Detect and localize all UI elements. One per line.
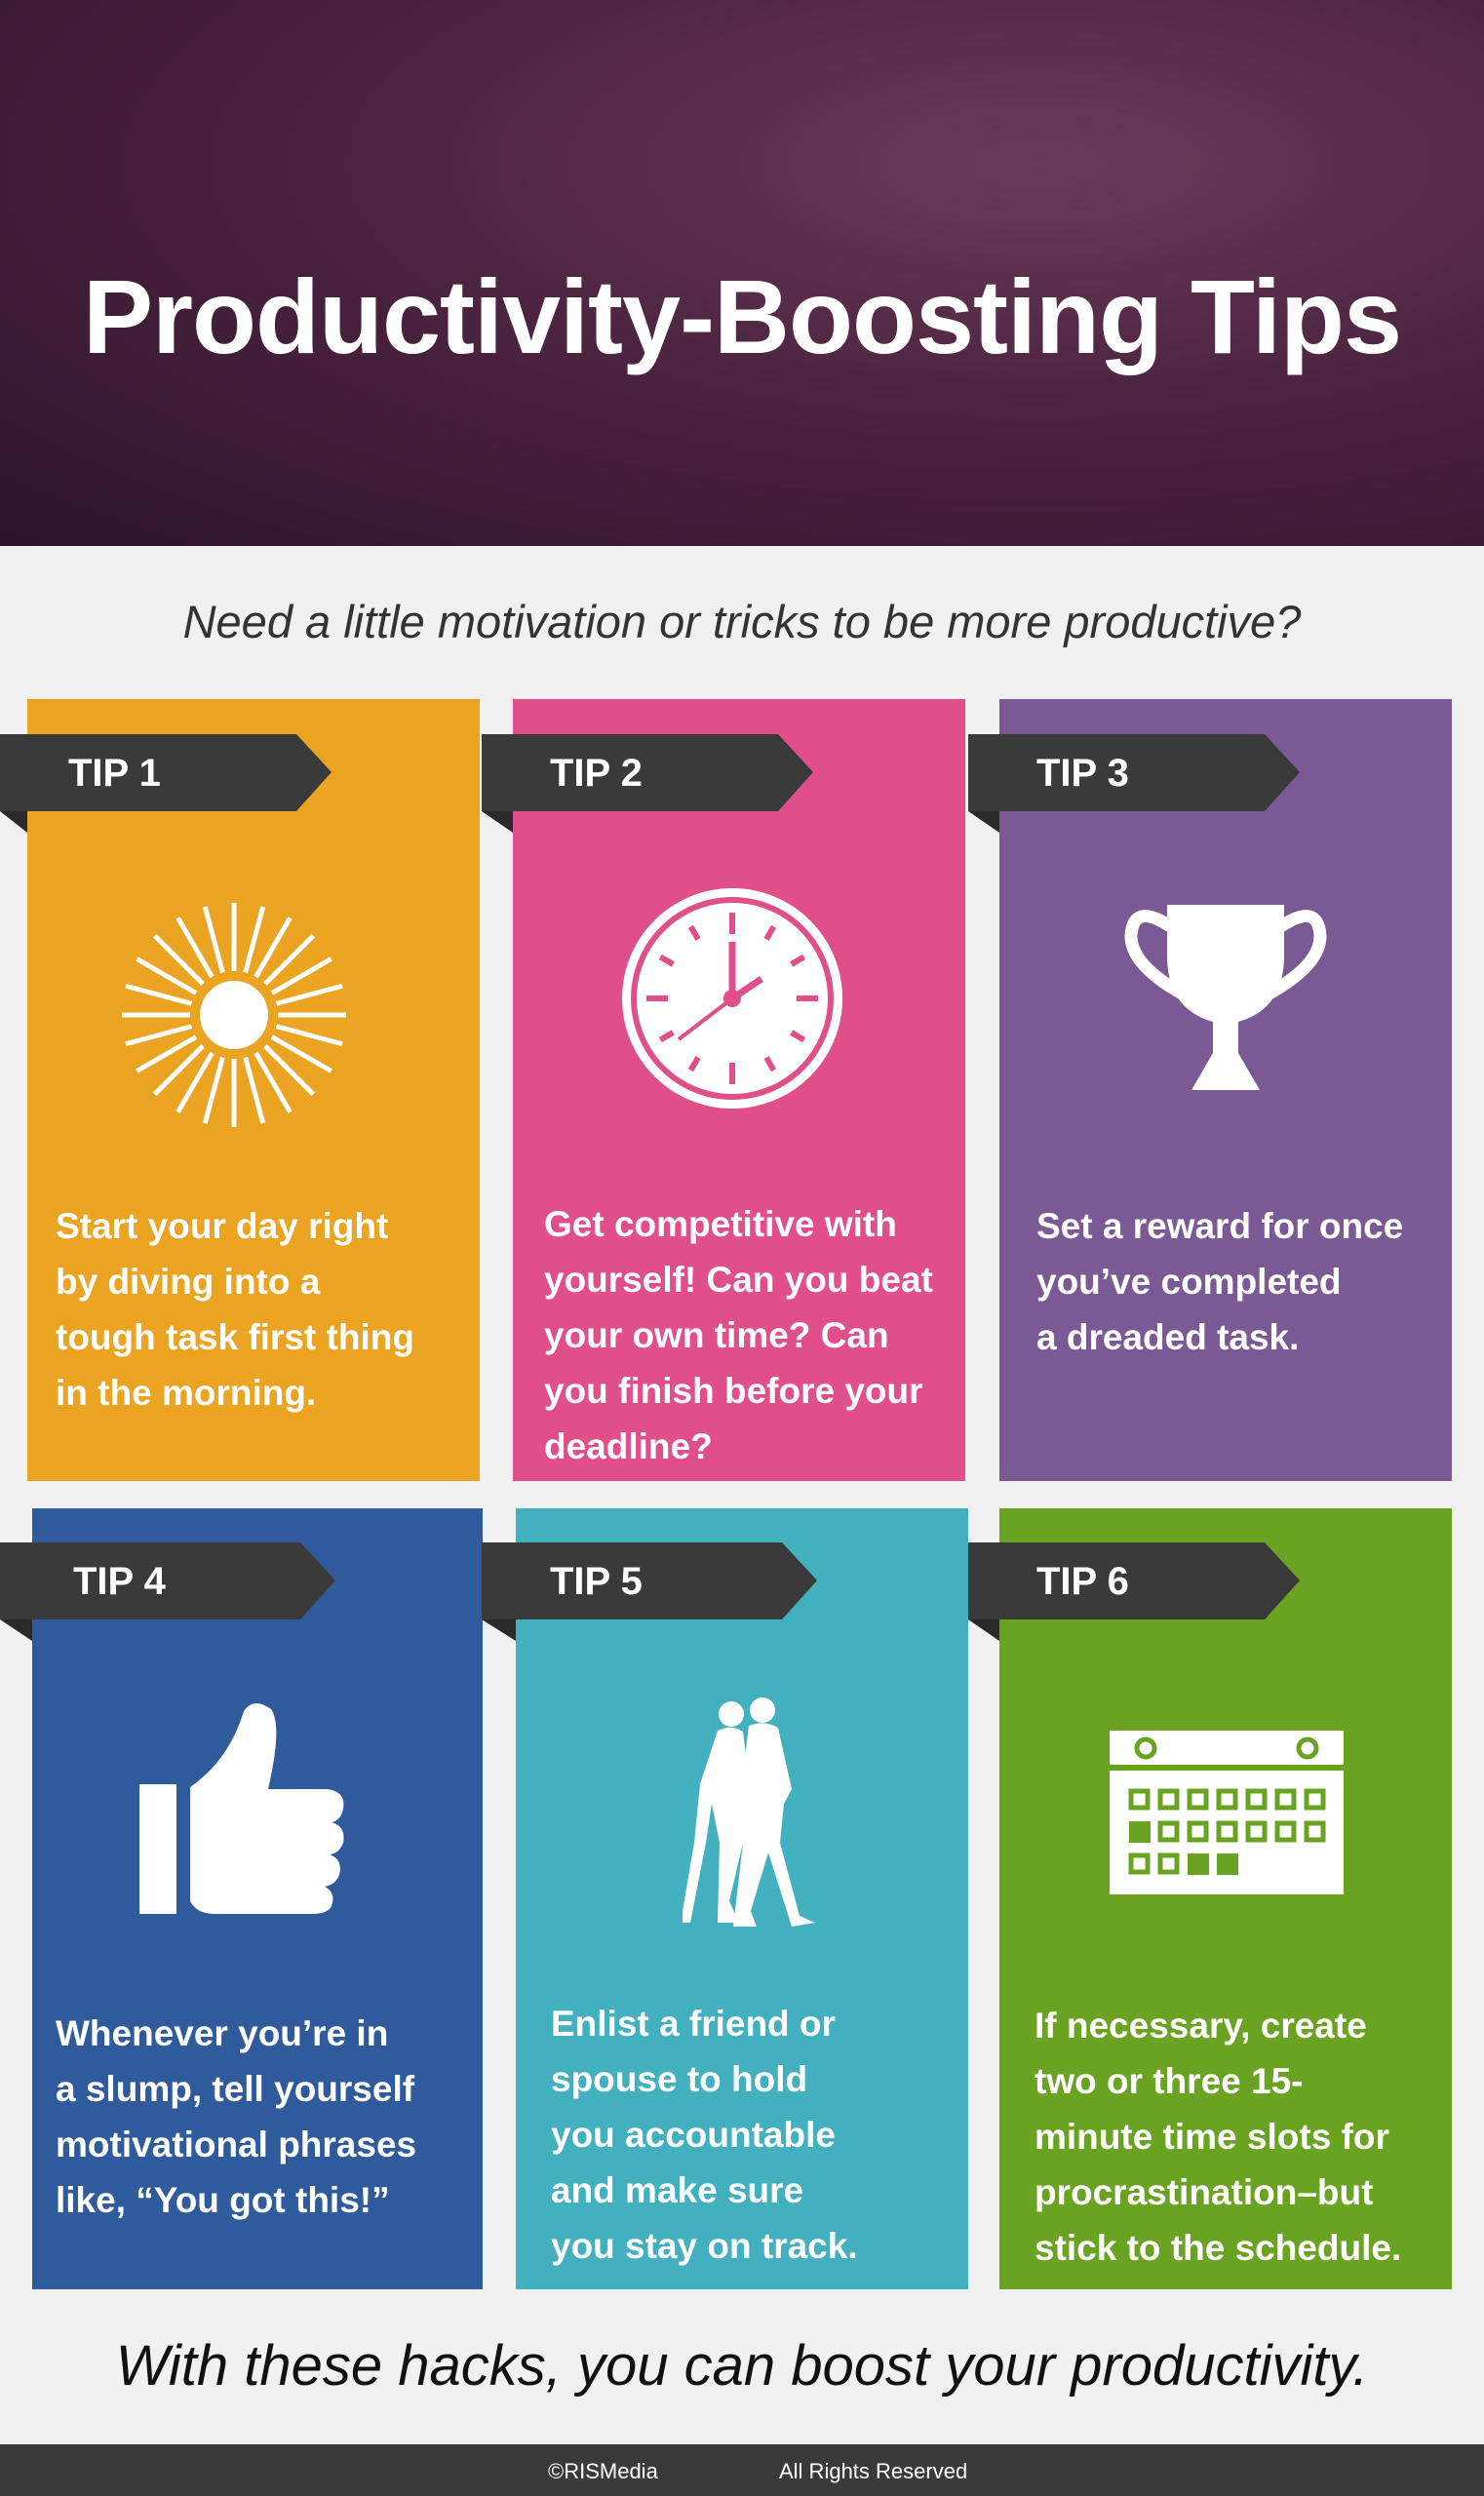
panel: tip 3 [999, 699, 1452, 1481]
text: tip 4: motivational phrases [56, 2125, 416, 2164]
text: tip 3: a dreaded task. [1036, 1317, 1299, 1357]
text: tip 2: Get competitive with [544, 1204, 897, 1244]
text: tip 6: procrastination–but [1035, 2172, 1373, 2212]
text: tip 6: If necessary, create [1035, 2006, 1367, 2046]
banner: TIP 6 [968, 1542, 1300, 1641]
panel: tip 6 [999, 1508, 1452, 2289]
text: tip 6 [1035, 2006, 1401, 2268]
icon: sun [122, 903, 346, 1127]
icon: clock [622, 888, 842, 1109]
footer bar: All Rights Reserved [779, 2459, 967, 2483]
text: tip 2: you finish before your [544, 1371, 923, 1411]
banner: TIP 3 [968, 734, 1300, 833]
icon: two people walking [683, 1697, 815, 1927]
banner: TIP 3: TIP 3 [1036, 752, 1129, 795]
text: tip 1: Start your day right [56, 1206, 388, 1246]
banner: TIP 5 [482, 1542, 817, 1641]
footer bar [0, 2444, 1484, 2496]
text: tip 2: your own time? Can [544, 1315, 889, 1355]
text: tip 1 [56, 1206, 414, 1413]
panel: tip 5 [516, 1508, 968, 2289]
text: tip 3: you’ve completed [1036, 1262, 1342, 1302]
text: tip 5: and make sure [551, 2170, 803, 2210]
text: tip 1: tough task first thing [56, 1317, 414, 1357]
text: tip 5: you stay on track. [551, 2226, 858, 2266]
text: tip 4: a slump, tell yourself [56, 2069, 414, 2109]
banner: TIP 6: TIP 6 [1036, 1560, 1129, 1603]
panel: tip 4 [32, 1508, 483, 2289]
text: tip 5: spouse to hold [551, 2059, 807, 2099]
banner: TIP 5: TIP 5 [550, 1560, 643, 1603]
icon: trophy [1125, 905, 1326, 1090]
banner: TIP 4: TIP 4 [73, 1560, 166, 1603]
panel: tip 1 [27, 699, 480, 1481]
panel: tip 2 [513, 699, 965, 1481]
text: tip 5: you accountable [551, 2115, 836, 2155]
text: tip 4: Whenever you’re in [56, 2013, 388, 2053]
text: tip 6: minute time slots for [1035, 2117, 1389, 2157]
text: tip 2 [544, 1204, 933, 1466]
text: tip 4 [56, 2013, 416, 2220]
header photo [0, 0, 1484, 546]
subtitle: Need a little motivation or tricks to be more productive? [183, 596, 1301, 647]
text: tip 2: yourself! Can you beat [544, 1260, 933, 1300]
banner: TIP 2: TIP 2 [550, 752, 643, 795]
banner: TIP 2 [482, 734, 813, 833]
text: tip 2: deadline? [544, 1426, 713, 1466]
text: tip 6: stick to the schedule. [1035, 2228, 1401, 2268]
text: tip 3 [1036, 1206, 1403, 1357]
text: tip 4: like, “You got this!” [56, 2180, 390, 2220]
text: tip 5 [551, 2004, 858, 2266]
title: Productivity-Boosting Tips [83, 257, 1401, 375]
icon: calendar [1110, 1731, 1344, 1894]
icon: thumbs up [139, 1703, 343, 1914]
text: tip 1: in the morning. [56, 1373, 316, 1413]
text: tip 5: Enlist a friend or [551, 2004, 836, 2044]
banner: TIP 4 [0, 1542, 335, 1641]
banner: TIP 1: TIP 1 [68, 752, 161, 795]
banner: TIP 1 [0, 734, 332, 833]
footer bar: ©RISMedia [548, 2459, 658, 2483]
closing tagline: With these hacks, you can boost your productivity. [116, 2334, 1368, 2398]
text: tip 6: two or three 15- [1035, 2061, 1303, 2101]
text: tip 3: Set a reward for once [1036, 1206, 1403, 1246]
text: tip 1: by diving into a [56, 1262, 320, 1302]
